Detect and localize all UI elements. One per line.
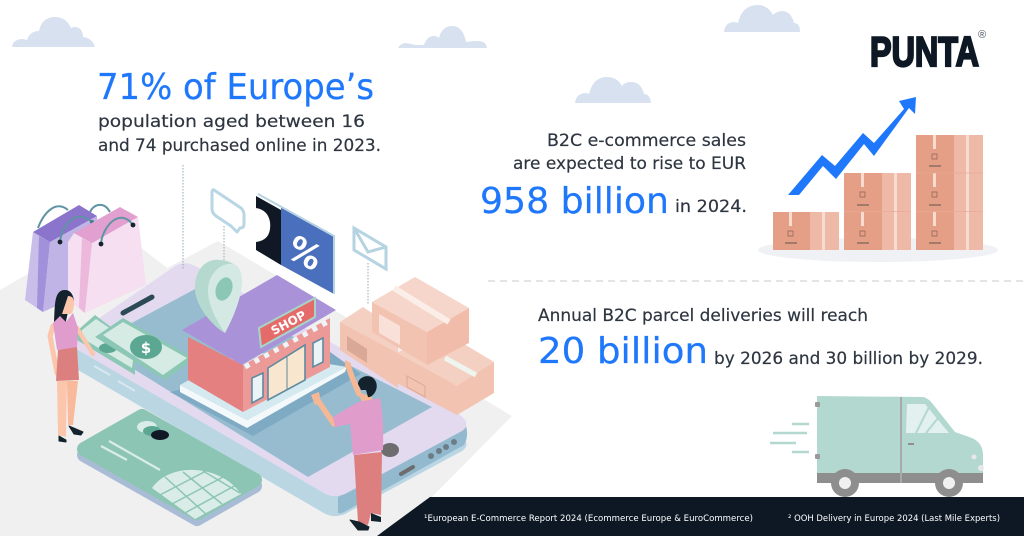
- footer band: [377, 497, 1024, 536]
- text block: parcel deliveries: [538, 306, 983, 372]
- logo: ®: [978, 29, 986, 41]
- title stat: 71 percent: [97, 67, 381, 155]
- text block: parcel deliveries: Annual B2C parcel deliveries will reach: [538, 306, 868, 325]
- title stat: 71 percent: 71% of Europe’s: [97, 67, 374, 108]
- stack 2: [844, 173, 911, 250]
- text block: B2C sales: B2C e-commerce sales: [547, 131, 746, 150]
- text block: parcel deliveries: by 2026 and 30 billion by 2029.: [714, 349, 983, 368]
- illustration: smartphone: [71, 263, 467, 516]
- phone screen: [100, 288, 432, 477]
- illustration: shop building: [170, 275, 361, 436]
- phone slot: [123, 297, 152, 313]
- illustration: parcel boxes: [340, 277, 494, 415]
- title stat: 71 percent: population aged between 16: [98, 112, 365, 131]
- text block: B2C sales: are expected to rise to EUR: [513, 154, 746, 173]
- icon: chat bubble: [212, 190, 244, 232]
- title stat: 71 percent: and 74 purchased online in 2023.: [98, 136, 381, 155]
- home button: [381, 443, 399, 457]
- illustration: coupon ticket: [256, 194, 334, 294]
- shop sign: [259, 298, 315, 347]
- illustration: banknotes: $: [141, 339, 151, 357]
- illustration: banknotes: [77, 315, 188, 380]
- text block: B2C sales: 958 billion: [480, 181, 669, 222]
- speed lines: [770, 424, 809, 452]
- icon: location pin: [195, 260, 242, 333]
- chart: boxes with growth arrow: [758, 97, 998, 262]
- text block: parcel deliveries: 20 billion: [538, 331, 708, 372]
- illustration: woman: [50, 290, 93, 442]
- icon: clouds: [12, 5, 800, 103]
- illustration: credit card: [84, 416, 255, 519]
- floor: isometric platform: [0, 225, 512, 536]
- dashed divider: [488, 280, 1024, 282]
- shop base: [170, 352, 361, 436]
- illustration: shopping bags: [25, 205, 146, 313]
- card globe: [152, 470, 241, 519]
- illustration: shop building: SHOP: [269, 308, 309, 338]
- growth arrow: [788, 97, 916, 195]
- shop roof: [182, 275, 336, 365]
- icon: envelope: [354, 228, 386, 269]
- shop windows: [252, 373, 263, 403]
- stack 3: [916, 135, 983, 250]
- logo: PUNTA: [870, 28, 979, 75]
- stack 1: [773, 212, 839, 250]
- illustration: delivery van: [770, 396, 984, 497]
- text block: B2C sales: in 2024.: [675, 197, 747, 216]
- shop door: [268, 345, 305, 400]
- footer band: ² OOH Delivery in Europe 2024 (Last Mile Experts): [788, 514, 1000, 524]
- percent sign: %: [280, 228, 329, 280]
- connector lines: [183, 165, 368, 305]
- footer band: ¹European E-Commerce Report 2024 (Ecommerce Europe & EuroCommerce): [424, 514, 753, 524]
- illustration: man: [311, 360, 383, 530]
- text block: B2C sales: [480, 131, 747, 222]
